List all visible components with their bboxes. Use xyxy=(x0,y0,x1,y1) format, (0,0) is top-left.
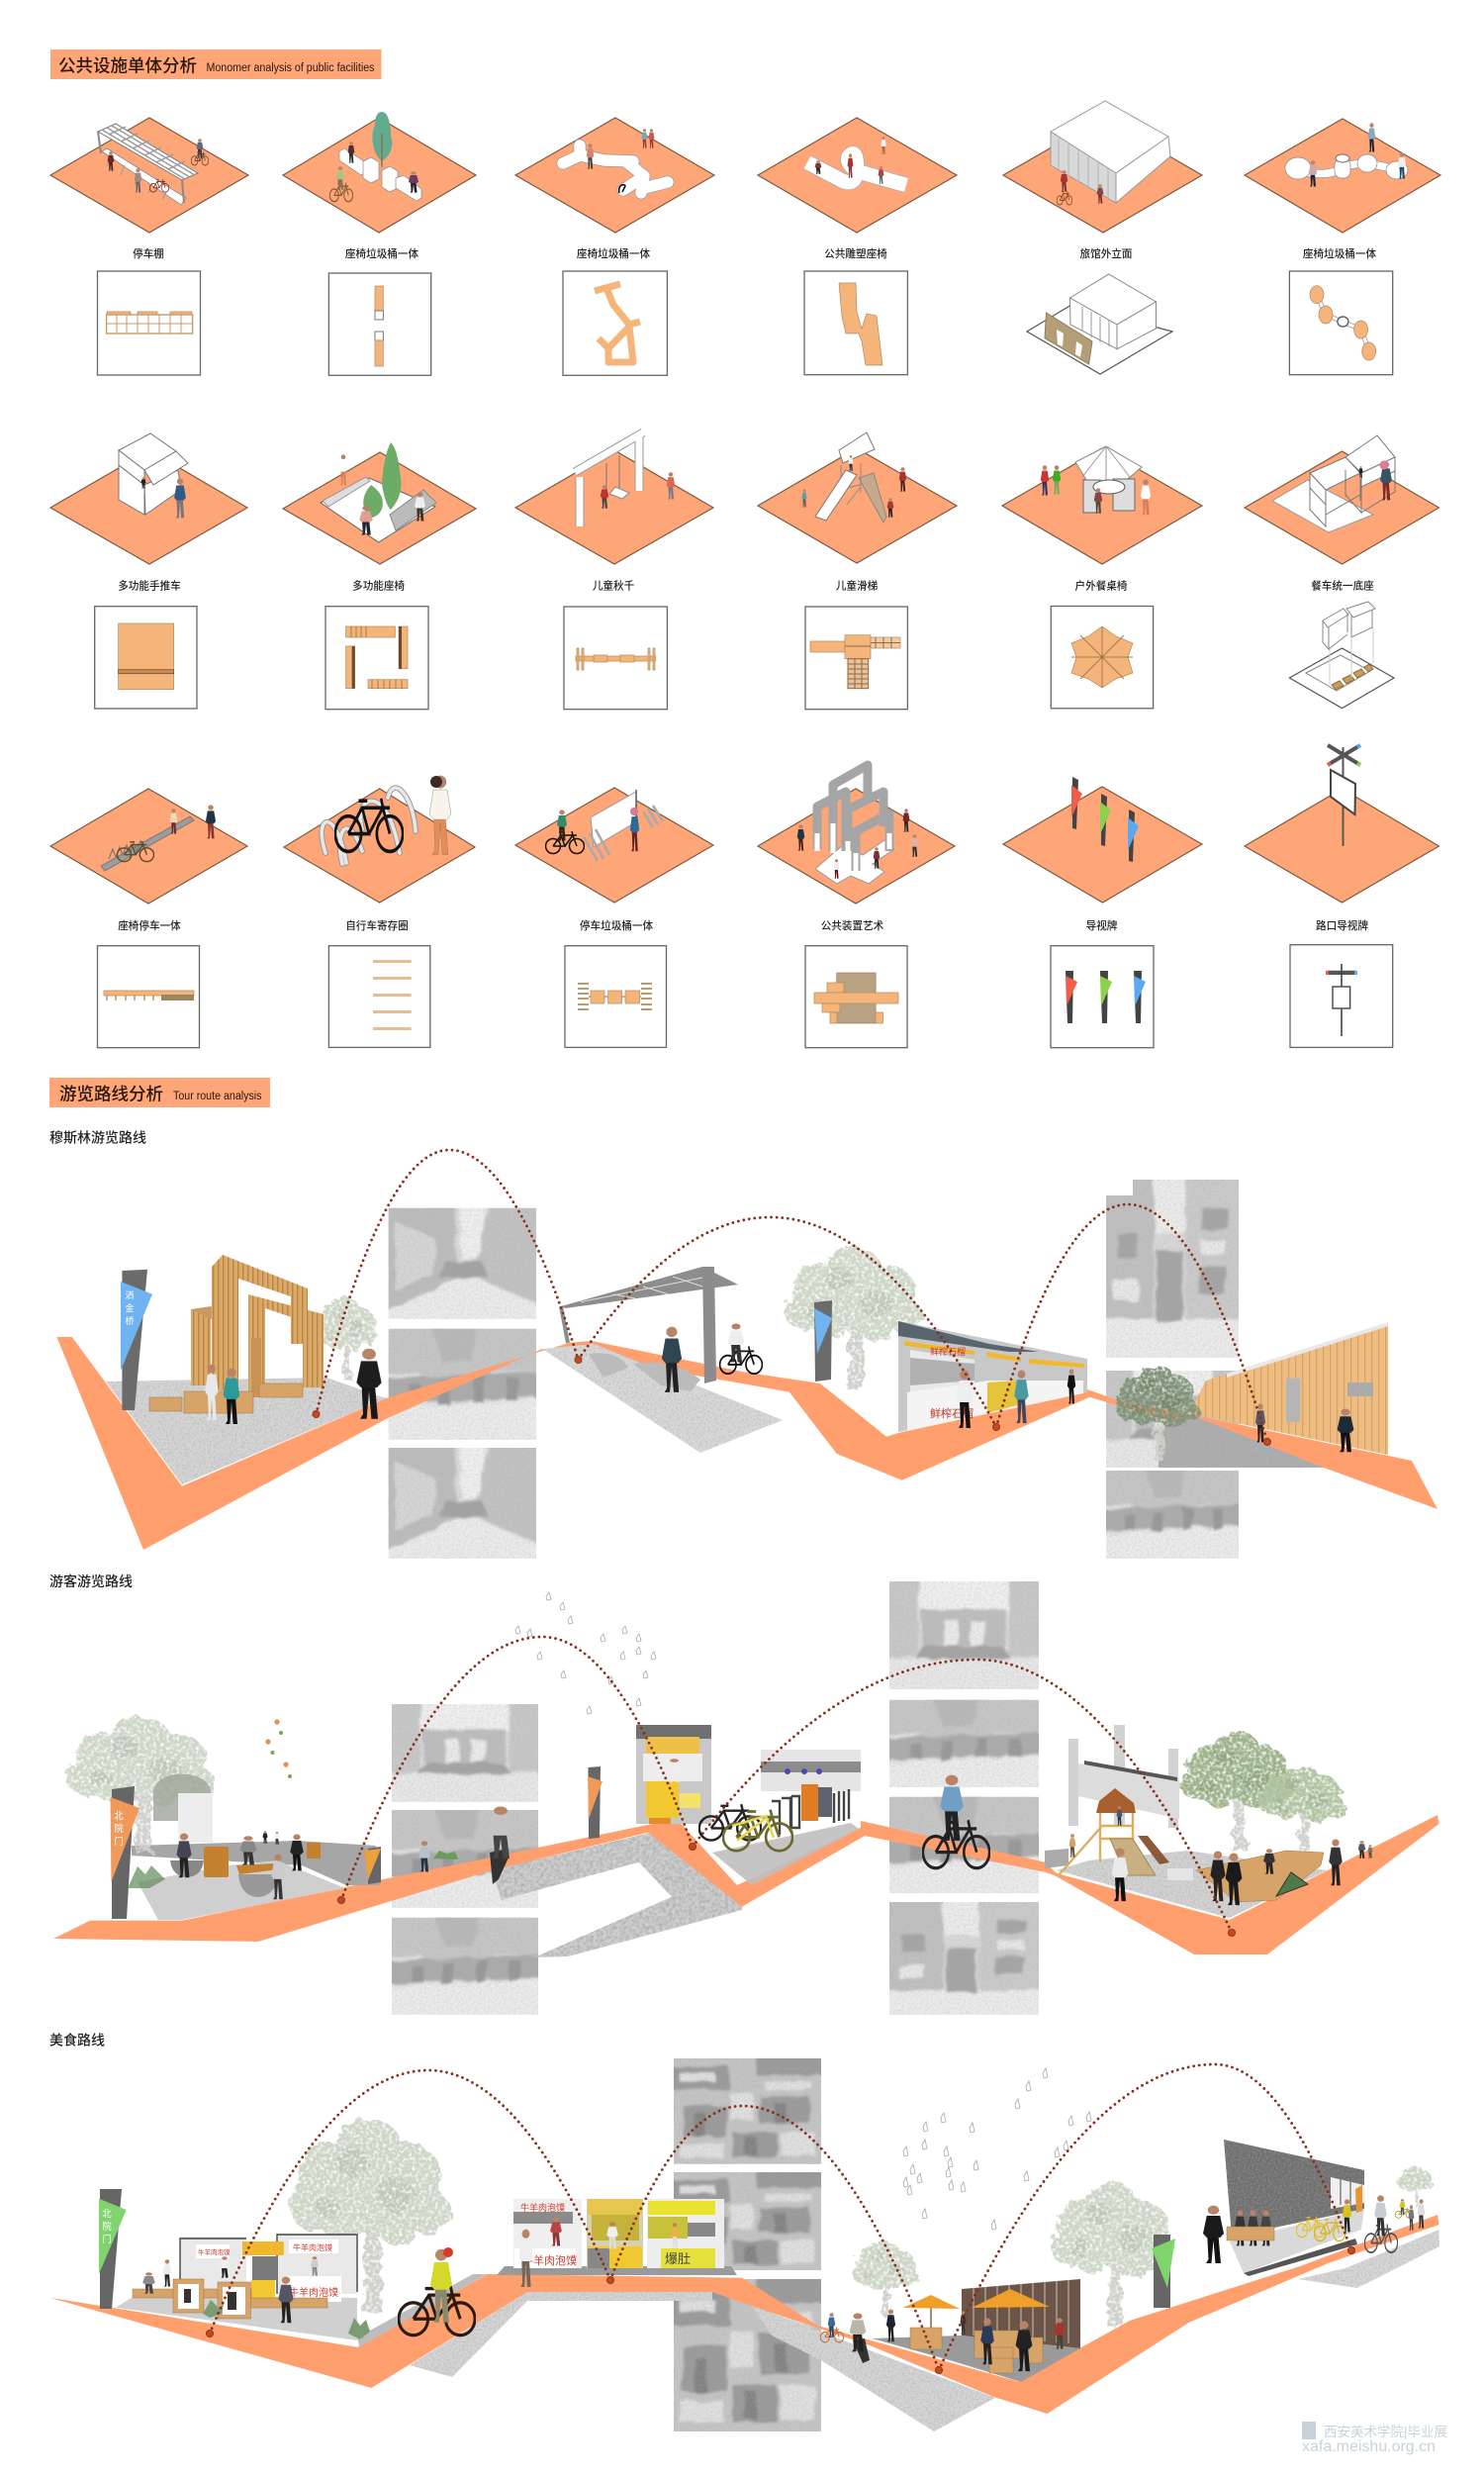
plan box xyxy=(563,271,667,375)
watermark xyxy=(1302,2422,1447,2455)
orange route band xyxy=(53,1815,1438,1954)
dotted arcs xyxy=(337,1637,1236,1937)
sign: orange: 院 xyxy=(114,1823,124,1835)
label: 多功能手推车 xyxy=(118,580,181,592)
label: 儿童秋千 xyxy=(593,580,635,592)
subheading: food route: 美食路线 xyxy=(49,2033,105,2049)
tree on lane xyxy=(1116,1365,1199,1460)
decorative leaves xyxy=(265,1719,292,1778)
stalls left: 牛羊肉泡馍 xyxy=(198,2247,231,2256)
plaza back wall xyxy=(132,1841,381,1885)
facility row 3 xyxy=(50,745,1438,1048)
yellow bikes xyxy=(1296,2217,1345,2240)
facility: children slide xyxy=(758,432,957,563)
plan box xyxy=(328,946,430,1047)
sign: green: 北 xyxy=(102,2209,112,2220)
person: seated man xyxy=(662,1327,682,1392)
section heading: monomer analysis: 公共设施单体分析 xyxy=(58,55,197,75)
facility row 1 xyxy=(50,101,1440,375)
section heading: monomer analysis: Monomer analysis of public facilities xyxy=(206,62,375,74)
subheading: tourist route: 游客游览路线 xyxy=(49,1573,133,1589)
dotted arcs xyxy=(313,1150,1271,1446)
watermark: xafa.meishu.org.cn xyxy=(1302,2438,1436,2455)
plan box xyxy=(805,946,907,1048)
label: 停车垃圾桶一体 xyxy=(580,919,653,932)
bike racks xyxy=(699,1750,861,1885)
tree and arch xyxy=(66,1716,215,1853)
cafe tree xyxy=(853,2240,918,2317)
kiosk xyxy=(636,1725,711,1824)
facility: bench bin C xyxy=(1245,119,1440,233)
plan box xyxy=(564,607,667,710)
paving: shelter walk xyxy=(542,1344,783,1453)
rough ground chevron xyxy=(492,1833,742,1957)
dotted arcs xyxy=(206,2064,1355,2374)
sign: green xyxy=(99,2189,127,2309)
facility: children swing xyxy=(515,432,713,564)
facility: bicycle shed xyxy=(50,118,248,233)
facility: bench bin A xyxy=(283,112,476,233)
facility: cart base xyxy=(1245,435,1438,564)
facility: hotel facade xyxy=(1003,101,1202,233)
large tree xyxy=(289,2118,451,2313)
food stalls: 牛羊肉泡馍 xyxy=(522,2253,577,2267)
facility: multifunction bench xyxy=(283,442,476,564)
cafe umbrellas and tables xyxy=(886,2289,1065,2373)
sign: orange: 门 xyxy=(114,1836,124,1848)
people at stalls xyxy=(142,2256,319,2323)
market stalls: 鲜榨石榴 xyxy=(930,1406,974,1420)
person: old man xyxy=(356,1349,382,1419)
label: 座椅垃圾桶一体 xyxy=(1303,247,1376,260)
exploded drawing xyxy=(1289,602,1394,709)
sign: orange post xyxy=(588,1766,603,1839)
paving sliver xyxy=(357,2274,487,2347)
cyclist with bike xyxy=(923,1775,989,1868)
label: 座椅垃圾桶一体 xyxy=(577,247,650,260)
subheading: Muslim route: 穆斯林游览路线 xyxy=(49,1130,146,1146)
moped and cycle xyxy=(820,2313,870,2363)
elevation drawing xyxy=(1027,274,1172,374)
plaza people xyxy=(176,1831,304,1899)
grey brick wall xyxy=(1224,2140,1364,2276)
paving: plaza xyxy=(106,1378,386,1484)
plan box xyxy=(1051,946,1154,1048)
food stall deck xyxy=(497,2266,737,2275)
stalls left: 牛羊肉泡馍 xyxy=(289,2286,338,2299)
sign: green: 院 xyxy=(102,2221,112,2233)
cyclist xyxy=(720,1323,762,1374)
label: 停车棚 xyxy=(133,247,164,260)
stone ground under route xyxy=(410,2292,712,2377)
lane paving xyxy=(1159,1415,1324,1468)
label: 公共装置艺术 xyxy=(821,919,884,932)
orange route band xyxy=(49,2215,1438,2414)
section heading: tour route xyxy=(49,1078,270,1107)
far cyclists xyxy=(1364,2166,1434,2252)
lattice screen wall xyxy=(962,2279,1080,2348)
plaza paving xyxy=(138,1860,345,1920)
plan box xyxy=(95,607,197,709)
label: 座椅停车一体 xyxy=(118,919,181,932)
street furniture xyxy=(128,1843,321,1897)
label: 座椅垃圾桶一体 xyxy=(345,247,418,260)
moped rider xyxy=(488,1807,513,1884)
plan box xyxy=(1051,606,1154,709)
facility: sculpture seat xyxy=(758,118,957,233)
stalls left: 牛羊肉泡馍 xyxy=(293,2242,332,2252)
label: 公共雕塑座椅 xyxy=(824,247,887,260)
plan box xyxy=(325,607,428,710)
watermark: 西安美术学院|毕业展 xyxy=(1324,2425,1447,2439)
sign: green: 门 xyxy=(102,2234,112,2245)
stone ground right xyxy=(1298,2230,1439,2288)
flock of birds xyxy=(903,2068,1091,2230)
stone ground center xyxy=(752,2306,995,2431)
facility: installation art xyxy=(758,765,955,904)
play tower xyxy=(1059,1788,1169,1875)
plan box xyxy=(328,273,431,375)
photo strip left xyxy=(389,1208,536,1559)
market stalls xyxy=(898,1321,1087,1432)
section heading: monomer analysis xyxy=(50,49,382,79)
tree with blue sign xyxy=(784,1247,923,1389)
facility: multifunction cart xyxy=(50,433,247,564)
photo strip left xyxy=(392,1704,538,2015)
plan box xyxy=(804,271,907,375)
wooden installation xyxy=(149,1255,378,1413)
label: 户外餐桌椅 xyxy=(1075,580,1128,592)
route 1 diagram xyxy=(56,1150,1438,1559)
stalls left xyxy=(133,2235,357,2308)
poster boxes xyxy=(173,2279,251,2319)
food stalls: 爆肚 xyxy=(665,2251,691,2266)
plan box xyxy=(97,946,200,1048)
facility row 2 xyxy=(50,432,1438,710)
trees at gate xyxy=(1181,1731,1345,1851)
facility: junction sign xyxy=(1245,745,1438,903)
label: 自行车寄存圈 xyxy=(345,919,409,932)
facility: bench bin B xyxy=(515,118,714,233)
food stalls: 牛羊肉泡馍 xyxy=(520,2202,565,2213)
people by wall xyxy=(1203,2199,1351,2263)
photo strip right xyxy=(1106,1179,1239,1559)
label: 路口导视牌 xyxy=(1316,919,1368,932)
small orange sign xyxy=(364,1847,381,1884)
cyclist in yellow xyxy=(399,2247,475,2335)
person and bushes near moped xyxy=(418,1841,458,1871)
label: 导视牌 xyxy=(1086,919,1118,932)
food stalls xyxy=(513,2199,724,2287)
plan box xyxy=(1290,945,1393,1047)
facility: outdoor dining xyxy=(1002,446,1202,564)
section heading: tour route: 游览路线分析 xyxy=(59,1085,163,1104)
facility: wayfinding signs xyxy=(1003,777,1202,903)
sign: blue: 桥 xyxy=(125,1315,135,1326)
memorial gate xyxy=(1045,1725,1179,1868)
facility: bike hoops xyxy=(284,776,475,903)
bus shelter xyxy=(561,1267,738,1391)
sign: orange xyxy=(111,1786,139,1919)
facility: bike bin xyxy=(515,788,713,903)
plan box xyxy=(805,607,907,710)
section heading: tour route: Tour route analysis xyxy=(173,1091,262,1102)
people on lane xyxy=(1255,1403,1353,1452)
flock of birds xyxy=(515,1592,656,1714)
cafe paving xyxy=(873,2335,1080,2382)
market stalls: 鲜榨石榴 xyxy=(930,1346,966,1357)
label: 多功能座椅 xyxy=(352,580,405,592)
photo strip right xyxy=(889,1581,1039,2015)
route 3 diagram xyxy=(49,2058,1439,2431)
plan box xyxy=(1289,271,1393,375)
plan box xyxy=(97,271,200,375)
plan box xyxy=(565,946,667,1047)
plaza paving left xyxy=(116,2294,357,2340)
people: seated couple xyxy=(205,1365,239,1424)
label: 儿童滑梯 xyxy=(836,580,879,592)
sign: blue: 洒 xyxy=(125,1289,135,1300)
sign: orange: 北 xyxy=(114,1811,124,1822)
square paving xyxy=(1057,1851,1327,1918)
orange route band xyxy=(56,1337,1438,1550)
slatted wall xyxy=(1189,1322,1388,1455)
route 2 diagram xyxy=(53,1581,1438,2015)
label: 餐车统一底座 xyxy=(1311,580,1374,592)
facility: bench bike rack xyxy=(50,789,247,904)
label: 旅馆外立面 xyxy=(1080,247,1133,260)
wooden benches xyxy=(1167,1851,1324,1902)
second tree and sign xyxy=(1051,2182,1175,2326)
sign: blue: 金 xyxy=(125,1302,135,1313)
photo strip xyxy=(674,2058,821,2431)
sign: blue xyxy=(121,1270,152,1410)
square people xyxy=(1112,1839,1373,1905)
plants xyxy=(203,2300,370,2339)
